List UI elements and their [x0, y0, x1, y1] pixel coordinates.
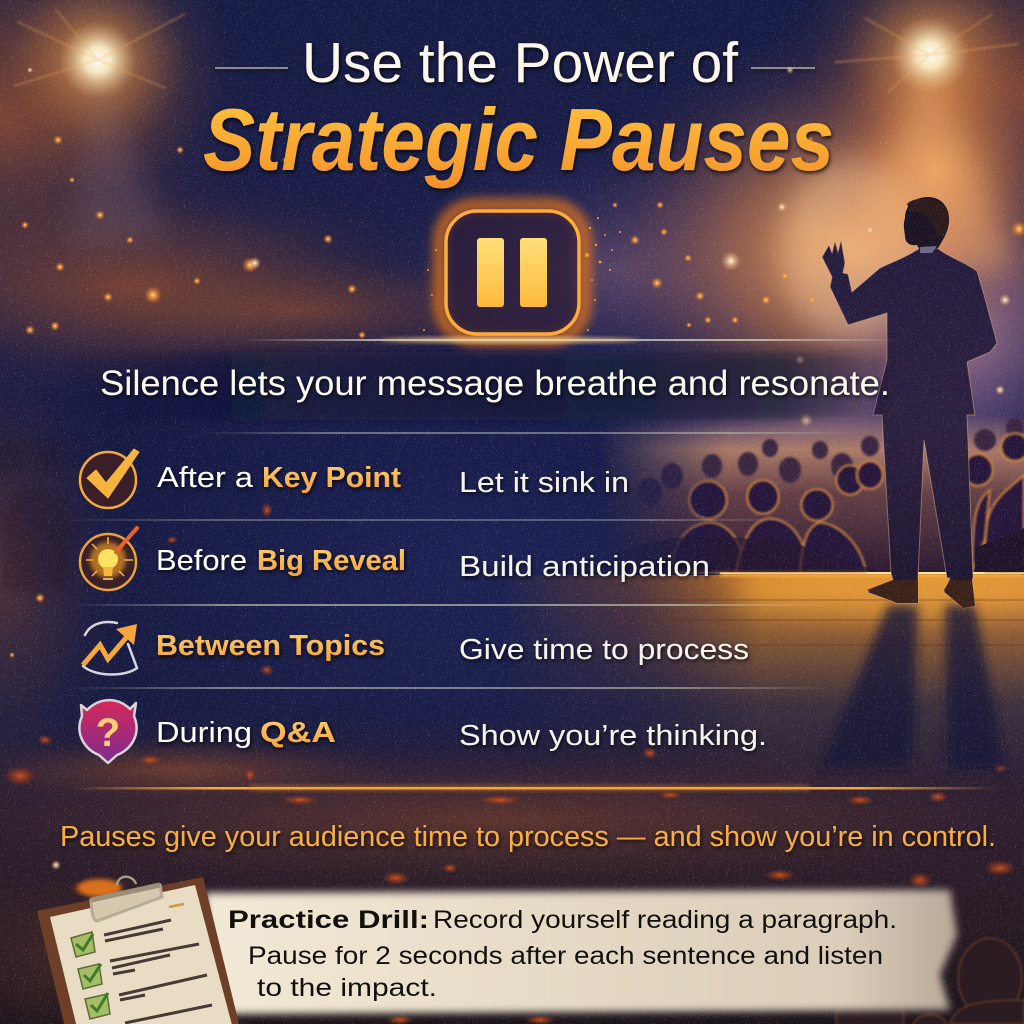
row: Between Topics	[83, 622, 749, 675]
description: Show you're thinking.: Show you’re thinking.	[459, 720, 767, 752]
audience crowd silhouettes	[600, 415, 1024, 572]
title line: Use the Power of: Use the Power of	[302, 31, 738, 95]
label: Before Big Reveal: Before	[156, 545, 247, 577]
spotlight: top left	[0, 0, 228, 250]
row: During Q&A	[79, 700, 767, 763]
label: Before Big Reveal	[156, 545, 406, 577]
label: During Q&A: During	[156, 717, 252, 749]
row divider	[70, 687, 830, 689]
faint audience heads: left edge	[0, 437, 75, 590]
audience heads: bottom right	[836, 938, 1024, 1024]
title line: Strategic Pauses: Strategic Pauses	[203, 90, 834, 189]
label: Between Topics: Between Topics	[156, 630, 385, 662]
icon: question bubble: ?	[96, 711, 120, 755]
drill text: to the impact.	[257, 974, 437, 1002]
divider above subtitle	[240, 337, 900, 343]
drill text: Record yourself reading a paragraph.	[433, 906, 897, 934]
drill text: Practice Drill:	[228, 906, 429, 934]
drill text: Pause for 2 seconds after each sentence and listen	[248, 942, 883, 970]
description: Give time to process: Give time to process	[459, 634, 749, 666]
description: Build anticipation: Build anticipation	[459, 551, 710, 583]
row divider	[70, 604, 830, 606]
row: After a Key Point	[80, 449, 629, 508]
label: After a Key Point	[157, 462, 401, 494]
icon: question bubble	[79, 700, 137, 763]
row: Before Big Reveal	[80, 528, 710, 590]
icon: rising arrow in arcs	[83, 622, 137, 675]
key message: Pauses give your audience time to process — and show you’re in control.	[60, 821, 996, 853]
label: During Q&A: Q&A	[260, 717, 336, 749]
subtitle band and text: Silence lets your message breathe and resonate.	[100, 364, 890, 403]
subtitle band and text	[60, 352, 895, 420]
spotlight: top right	[800, 0, 1024, 270]
row divider	[60, 519, 800, 521]
speaker silhouette	[822, 197, 997, 608]
speaker shadows on stage	[820, 605, 1005, 770]
stage floor with warm light	[518, 572, 1024, 771]
icon: light bulb	[80, 528, 137, 590]
label: After a Key Point: Key Point	[262, 462, 401, 494]
label: During Q&A	[156, 717, 336, 749]
divider below subtitle	[200, 432, 860, 434]
label: After a Key Point: After a	[157, 462, 254, 494]
icon: clipboard checklist	[37, 877, 243, 1024]
label: Before Big Reveal: Big Reveal	[257, 545, 406, 577]
drill text	[228, 906, 897, 1002]
panel: practice drill	[205, 890, 957, 1014]
icon: glowing pause button	[423, 205, 621, 340]
orange divider	[70, 785, 1000, 791]
icon: check mark	[80, 449, 139, 508]
description: Let it sink in: Let it sink in	[459, 467, 629, 499]
